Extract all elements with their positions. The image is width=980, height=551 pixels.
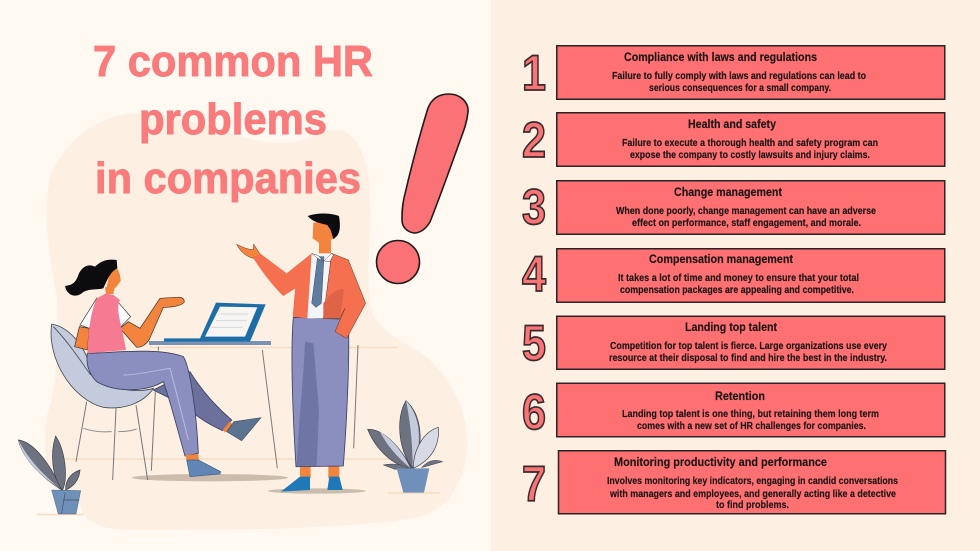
item 5 heading: Landing top talent [685, 320, 777, 334]
icon: exclamation mark [376, 94, 468, 284]
floor shadow [132, 474, 288, 481]
item 7 text: Involves monitoring key indicators, engaging in candid conversations [607, 475, 898, 487]
item 3 heading: Change management [674, 185, 782, 199]
item 6 text [622, 408, 879, 432]
potted plant right [368, 401, 443, 493]
item 3 text: effect on performance, staff engagement, and morale. [632, 217, 861, 229]
item 1 text: serious consequences for a small company. [649, 82, 831, 94]
item 3 number: 3 [522, 179, 546, 235]
item 6 panel [557, 383, 945, 437]
item 7 text [607, 475, 898, 511]
item 5 text [609, 340, 887, 364]
title: in companies [95, 154, 361, 203]
item 4 text: compensation packages are appealing and competitive. [620, 284, 854, 296]
item 1 text: Failure to fully comply with laws and regulations can lead to [612, 70, 866, 82]
item 2 panel [557, 113, 945, 166]
man [237, 213, 366, 492]
item 6 text: comes with a new set of HR challenges for companies. [637, 420, 866, 432]
item 2 text [622, 137, 878, 161]
item 4 heading: Compensation management [649, 252, 793, 266]
item 4 text [618, 272, 859, 296]
title: 7 common HR [93, 37, 373, 86]
title [93, 37, 373, 203]
item 3 text [616, 205, 876, 229]
title: problems [139, 95, 327, 144]
item 2 heading: Health and safety [688, 117, 776, 131]
right panel background [491, 0, 980, 551]
item 4 panel [557, 249, 945, 302]
floor shadow [268, 488, 366, 494]
background blob [45, 113, 467, 530]
item 7 text: to find problems. [716, 499, 789, 511]
laptop [164, 303, 266, 342]
illustration: man standing [237, 213, 443, 494]
item 3 text: When done poorly, change management can have an adverse [616, 205, 876, 217]
item 4 text: It takes a lot of time and money to ensure that your total [618, 272, 859, 284]
item 6 heading: Retention [715, 389, 765, 403]
item 7 panel [558, 451, 946, 514]
item 7 heading: Monitoring productivity and performance [614, 455, 827, 469]
item 2 text: Failure to execute a thorough health and safety program can [622, 137, 878, 149]
left panel background [0, 0, 491, 551]
desk leg right [354, 345, 358, 448]
item 6 number: 6 [522, 384, 546, 440]
item 1 text [612, 70, 866, 94]
item 1 heading: Compliance with laws and regulations [624, 50, 817, 64]
item 5 text: Competition for top talent is fierce. Large organizations use every [610, 340, 887, 352]
item 6 text: Landing top talent is one thing, but retaining them long term [622, 408, 879, 420]
item 1 panel [557, 46, 945, 99]
chair [51, 324, 155, 480]
woman [65, 260, 261, 477]
desk [149, 341, 277, 468]
item 5 number: 5 [522, 315, 546, 371]
item 5 panel [557, 316, 945, 369]
illustration: woman at desk [18, 260, 288, 514]
item 2 text: expose the company to costly lawsuits and injury claims. [630, 149, 870, 161]
item 5 text: resource at their disposal to find and hire the best in the industry. [609, 352, 887, 364]
item 1 number: 1 [522, 45, 546, 101]
floor and table lines [37, 348, 440, 514]
item 3 panel [557, 181, 945, 234]
potted plant left [18, 436, 81, 514]
item 4 number: 4 [522, 246, 546, 302]
item 7 text: with managers and employees, and generally acting like a detective [609, 488, 896, 500]
item 7 number: 7 [522, 456, 546, 512]
item 2 number: 2 [522, 112, 546, 168]
